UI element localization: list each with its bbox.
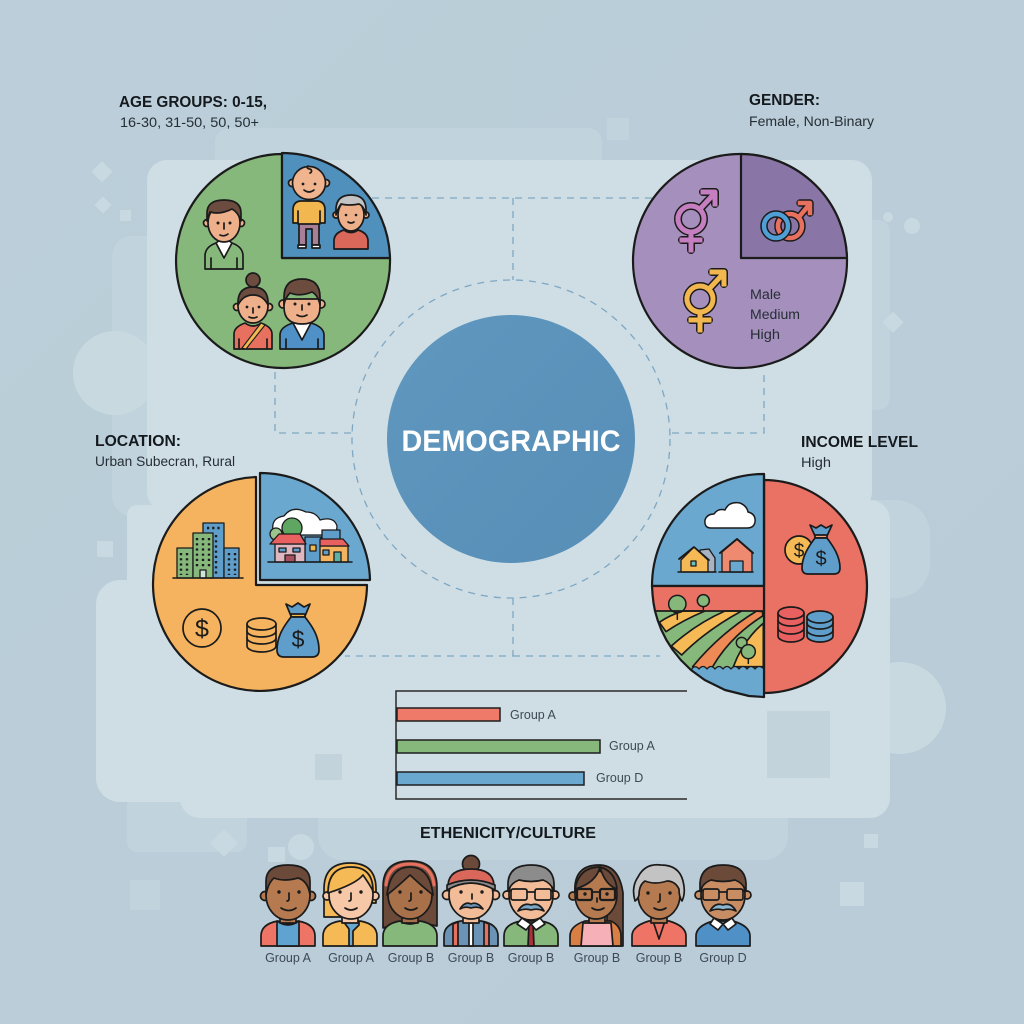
pie: age groups xyxy=(176,153,390,368)
icon: dollar coin xyxy=(183,609,221,647)
heading: income level: INCOME LEVEL xyxy=(801,434,918,451)
icon: city buildings xyxy=(173,523,243,578)
icon: coin and money bag xyxy=(785,525,840,574)
pie text: High xyxy=(750,327,780,342)
icon: pink gender symbol xyxy=(678,192,715,250)
icon: coin and money bag: $ xyxy=(815,548,827,570)
band: red above field xyxy=(652,586,764,611)
illustration: farmland xyxy=(655,595,764,697)
heading: income level: High xyxy=(801,455,831,470)
center title: DEMOGRAPHIC xyxy=(402,425,620,458)
heading: gender xyxy=(749,92,874,129)
pie: location xyxy=(153,473,370,691)
icon: person blue jacket xyxy=(279,279,325,349)
blue water strip xyxy=(691,666,764,697)
person 3 xyxy=(383,861,437,965)
person 8 xyxy=(695,865,751,965)
person 6 xyxy=(569,865,623,965)
ethnicity people row xyxy=(260,856,751,965)
icon: suburban houses xyxy=(268,509,352,562)
label: Group B xyxy=(636,951,682,965)
icon: farm houses xyxy=(678,539,753,572)
icon: coin stack xyxy=(247,618,276,652)
heading: age groups xyxy=(119,94,267,130)
pie: gender xyxy=(633,154,847,368)
icon: money bag: $ xyxy=(292,626,305,652)
pie: income level xyxy=(652,474,867,697)
heading: age groups: 16-30, 31-50, 50, 50+ xyxy=(120,115,259,130)
heading: age groups: AGE GROUPS: 0-15, xyxy=(119,94,267,111)
icon: coin stacks xyxy=(778,607,833,642)
icon: person green sweater xyxy=(204,200,244,269)
heading: ethnicity: ETHENICITY/CULTURE xyxy=(420,825,596,842)
label: Group B xyxy=(448,951,494,965)
pie text: Medium xyxy=(750,307,800,322)
label: Group B xyxy=(388,951,434,965)
pie outline lower-left xyxy=(652,586,764,697)
heading: location xyxy=(95,433,235,469)
pie text xyxy=(750,287,800,342)
heading: gender: Female, Non-Binary xyxy=(749,114,874,129)
label: Group B xyxy=(508,951,554,965)
bar: green xyxy=(397,739,656,753)
person 2 xyxy=(323,863,379,965)
bar chart xyxy=(396,691,687,799)
icon: interlocked rings xyxy=(764,203,810,238)
bar: red xyxy=(397,708,557,722)
heading: location: Urban Subecran, Rural xyxy=(95,454,235,469)
label: Group B xyxy=(574,951,620,965)
icon: person with bun xyxy=(234,273,272,349)
heading: income level xyxy=(801,434,918,470)
heading: gender: GENDER: xyxy=(749,92,820,109)
icon: grey-haired person xyxy=(333,195,369,249)
icon: baby xyxy=(288,166,330,248)
bar: red: Group A xyxy=(510,708,557,722)
dashed connectors xyxy=(275,198,764,656)
icon: coin and money bag: $ xyxy=(794,541,805,562)
icon: cloud xyxy=(705,503,755,528)
icon: dollar coin: $ xyxy=(195,615,209,643)
label: Group D xyxy=(699,951,747,965)
label: Group A xyxy=(265,951,312,965)
person 5 xyxy=(503,865,559,965)
label: Group A xyxy=(328,951,375,965)
icon: gold gender symbol xyxy=(687,272,724,330)
bar: green: Group A xyxy=(609,739,656,753)
person 7 xyxy=(632,865,686,965)
bar: blue: Group D xyxy=(596,771,643,785)
heading: location: LOCATION: xyxy=(95,433,181,450)
person 1 xyxy=(260,865,316,965)
central circle: demographic xyxy=(387,315,635,563)
bar: blue xyxy=(397,771,643,785)
icon: money bag xyxy=(277,603,319,657)
person 4 xyxy=(442,856,500,965)
pie text: Male xyxy=(750,287,781,302)
